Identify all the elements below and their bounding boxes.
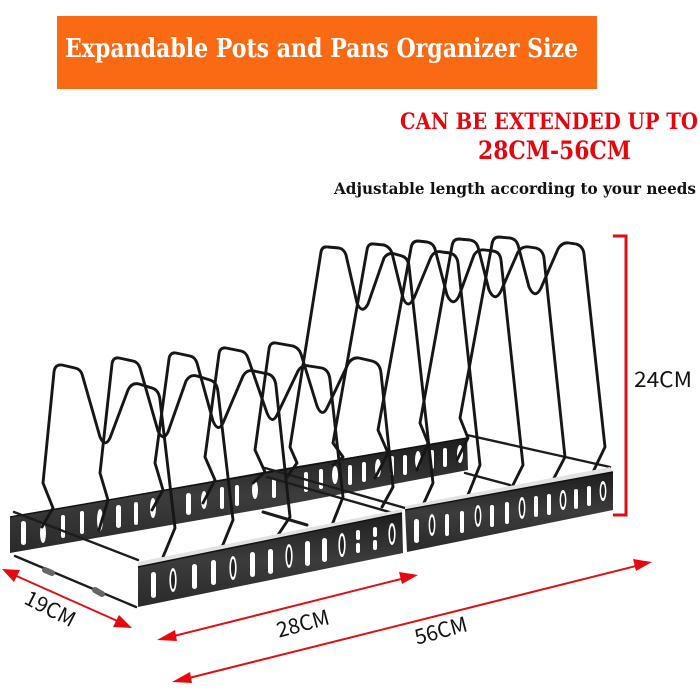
arrow: extended length — [172, 559, 652, 683]
front rail: left section — [138, 509, 403, 607]
back rail — [10, 438, 468, 553]
width label: 19CM — [20, 583, 81, 634]
closed length label: 28CM — [273, 602, 333, 644]
arrow: closed length — [157, 572, 418, 641]
callout: extension range: 28CM-56CM — [478, 136, 631, 165]
front rail: right section — [405, 467, 613, 552]
side and cross wires — [14, 435, 610, 607]
title banner — [57, 16, 597, 89]
height bracket — [613, 236, 626, 515]
height label: 24CM — [634, 364, 692, 394]
organizer rack illustration — [10, 237, 613, 607]
wire dividers: tall set — [287, 237, 605, 505]
arrow: width — [2, 569, 132, 628]
callout: extension range — [400, 109, 698, 165]
title banner: Expandable Pots and Pans Organizer Size — [65, 34, 578, 64]
wire dividers: short set — [42, 343, 393, 557]
extended length label: 56CM — [411, 609, 471, 651]
